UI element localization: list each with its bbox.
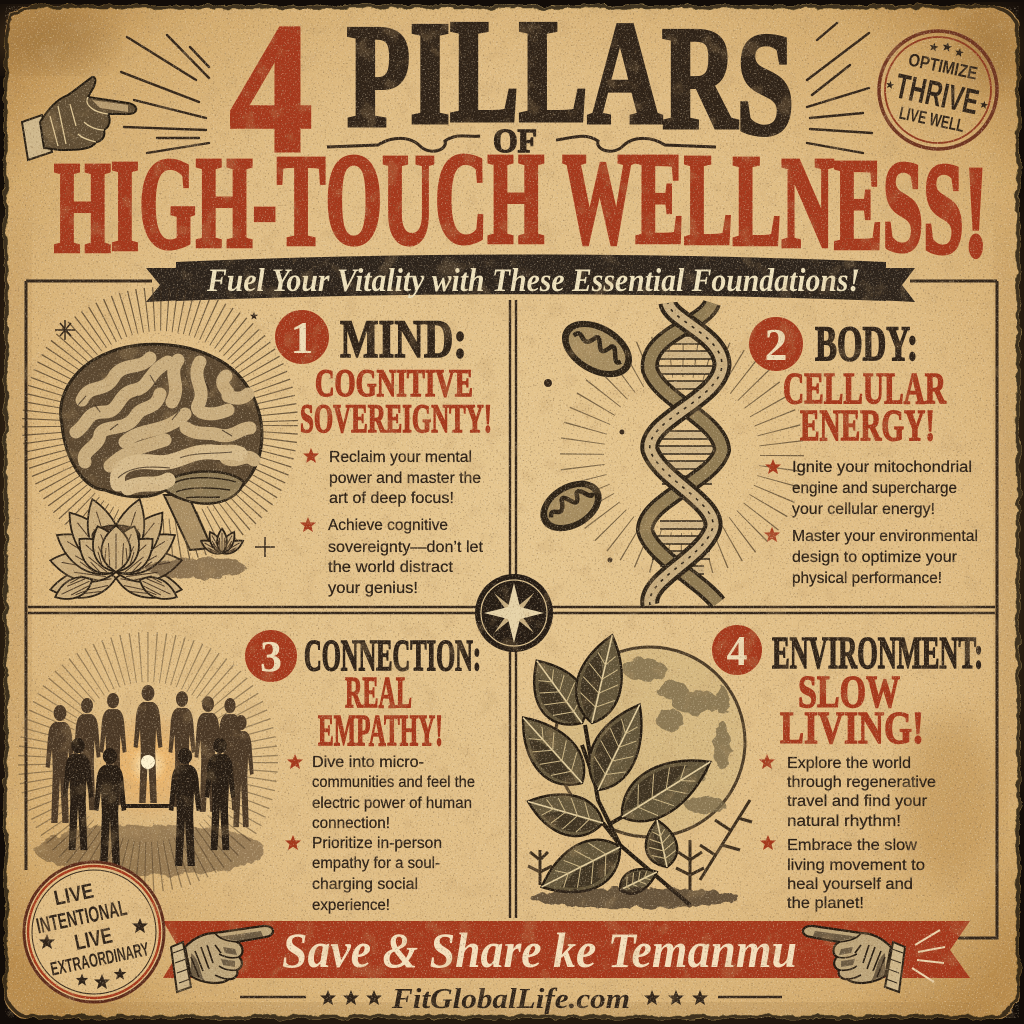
bullet text block: power and master the <box>329 470 481 487</box>
sunburst rays around title <box>121 23 872 153</box>
ribbon text: Save & Share ke Temanmu <box>282 922 797 978</box>
subtitle ribbon: Fuel Your Vitality with These Essential Foundations! <box>206 263 860 299</box>
bullet text block: design to optimize your <box>792 549 957 566</box>
stamp: optimize thrive live well: OPTIMIZE <box>907 49 979 84</box>
bullet text block: Achieve cognitive <box>328 517 448 534</box>
bullet text block: Embrace the slow <box>787 837 918 854</box>
bullet text block: electric power of human <box>312 795 472 812</box>
stamp: optimize thrive live well: LIVE WELL <box>897 103 966 136</box>
bullet text block: the planet! <box>787 895 864 912</box>
illustration: brain with lotus <box>44 309 276 606</box>
stamp: live intentional live extraordinary <box>24 862 164 1002</box>
heading: body: BODY: <box>815 315 918 371</box>
numbered badge 3 <box>245 630 297 682</box>
bullet text block: travel and find your <box>787 793 927 810</box>
bottom red ribbon <box>163 921 970 978</box>
numbered badge 1 <box>275 310 329 364</box>
illustration: moon and leaves <box>505 630 752 909</box>
subheading: energy: ENERGY! <box>800 401 935 450</box>
bullet text block: physical performance! <box>792 570 942 587</box>
bullet text block: sovereignty—don’t let <box>328 539 484 556</box>
panel: body <box>531 303 978 605</box>
subheading: empathy: EMPATHY! <box>318 706 443 755</box>
subheading: slow: SLOW <box>798 666 900 717</box>
bullet text block: charging social <box>312 876 418 893</box>
numbered badge 4: 4 <box>726 629 748 675</box>
bullet text block: Reclaim your mental <box>329 449 472 466</box>
bullet text block <box>285 754 475 914</box>
stamp: optimize thrive live well <box>868 20 1008 160</box>
bullet text block <box>300 448 484 597</box>
subheading: cognitive: COGNITIVE <box>315 362 473 405</box>
subheading: sovereignty: SOVEREIGNTY! <box>300 396 492 441</box>
heading: connection: CONNECTION: <box>304 631 481 680</box>
bullet text block: engine and supercharge <box>792 480 957 497</box>
subtitle ribbon <box>146 254 915 302</box>
compass emblem <box>475 574 553 652</box>
bullet text block: connection! <box>312 815 390 832</box>
title: OF with flourishes <box>327 123 716 160</box>
bullet text block: Prioritize in-person <box>312 835 442 852</box>
numbered badge 1: 1 <box>290 312 314 363</box>
footer website: FitGlobalLife.com <box>391 983 630 1015</box>
numbered badge 4 <box>712 625 762 675</box>
icon: left pointing hand <box>171 926 273 992</box>
numbered badge 2 <box>749 317 803 371</box>
stamp: live intentional live extraordinary: EXTRAORDINARY <box>49 939 151 981</box>
subheading: real: REAL <box>345 668 412 717</box>
panel: connection <box>35 630 481 914</box>
bullet text block: heal yourself and <box>787 876 913 893</box>
icon: right pointing hand <box>803 926 905 992</box>
bullet text block: the world distract <box>328 559 454 576</box>
bullet text block: Master your environmental <box>792 528 978 545</box>
illustration: circle of people <box>35 657 265 876</box>
bullet text block: communities and feel the <box>312 774 475 791</box>
stamp: optimize thrive live well: THRIVE <box>892 67 982 122</box>
accent rays on ribbon <box>912 930 945 982</box>
bullet text block <box>764 459 978 587</box>
stamp: live intentional live extraordinary: LIVE <box>72 923 115 955</box>
stamp: live intentional live extraordinary: INTENTIONAL <box>34 895 129 939</box>
stamp: live intentional live extraordinary: LIVE <box>52 879 96 910</box>
heading: mind: MIND: <box>340 309 467 369</box>
bullet text block: natural rhythm! <box>787 813 901 830</box>
title: HIGH-TOUCH WELLNESS!: HIGH-TOUCH WELLNESS! <box>54 127 988 284</box>
bullet text block: art of deep focus! <box>329 490 454 507</box>
bullet text block: empathy for a soul- <box>312 855 440 872</box>
bullet text block: living movement to <box>787 857 925 874</box>
panel: mind <box>44 309 492 606</box>
subheading: cellular: CELLULAR <box>783 364 947 413</box>
bullet text block: experience! <box>312 897 390 914</box>
bullet text block: your genius! <box>328 580 418 597</box>
subheading: living: LIVING! <box>780 702 924 753</box>
numbered badge 2: 2 <box>764 319 788 370</box>
bullet text block: your cellular energy! <box>792 501 935 518</box>
bullet text block: Dive into micro- <box>312 754 424 771</box>
icon: pointing hand top left <box>22 77 136 160</box>
frame lines <box>26 281 997 938</box>
numbered badge 3: 3 <box>260 632 282 681</box>
panel: environment <box>505 625 983 912</box>
illustration: DNA with mitochondria <box>531 303 782 605</box>
bullet text block: Ignite your mitochondrial <box>792 459 972 476</box>
footer website <box>240 983 782 1015</box>
bullet text block: through regenerative <box>787 774 936 791</box>
bullet text block <box>759 754 936 912</box>
title: OF with flourishes: OF <box>493 123 537 160</box>
bullet text block: Explore the world <box>787 755 911 772</box>
